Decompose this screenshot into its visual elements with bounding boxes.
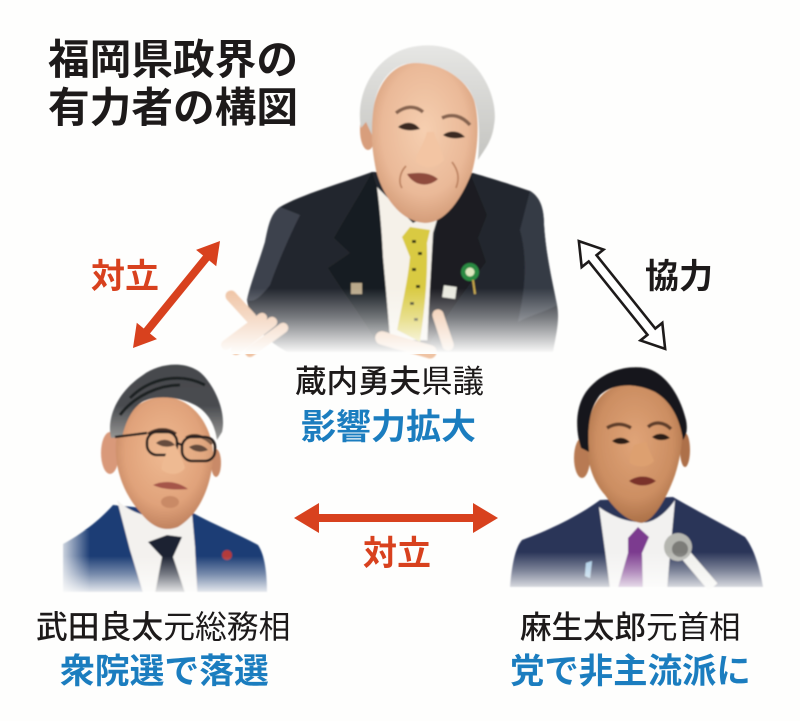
label: 対立 bottom: 対立 xyxy=(363,535,431,573)
status: 党で非主流派に: 党で非主流派に xyxy=(510,653,751,691)
caption: 武田良太元総務相: 武田良太元総務相 xyxy=(36,609,290,645)
portrait: 武田良太 xyxy=(55,365,275,596)
arrow: red double arrow bottom xyxy=(294,503,498,533)
title: 有力者の構図 xyxy=(48,84,298,131)
caption: 麻生太郎元首相: 麻生太郎元首相 xyxy=(520,609,741,645)
portrait: 蔵内勇夫 xyxy=(215,45,565,354)
arrow: red double arrow top-left xyxy=(123,233,230,356)
status: 衆院選で落選: 衆院選で落選 xyxy=(60,652,269,691)
title xyxy=(48,36,298,131)
caption: 蔵内勇夫県議: 蔵内勇夫県議 xyxy=(295,363,484,399)
arrow: white double arrow top-right xyxy=(568,232,676,358)
portrait: 麻生太郎 xyxy=(500,367,770,594)
label: 協力: 協力 xyxy=(645,258,713,296)
status: 影響力拡大: 影響力拡大 xyxy=(301,408,476,447)
title: 福岡県政界の xyxy=(48,36,298,83)
label: 対立 left: 対立 xyxy=(91,258,159,296)
